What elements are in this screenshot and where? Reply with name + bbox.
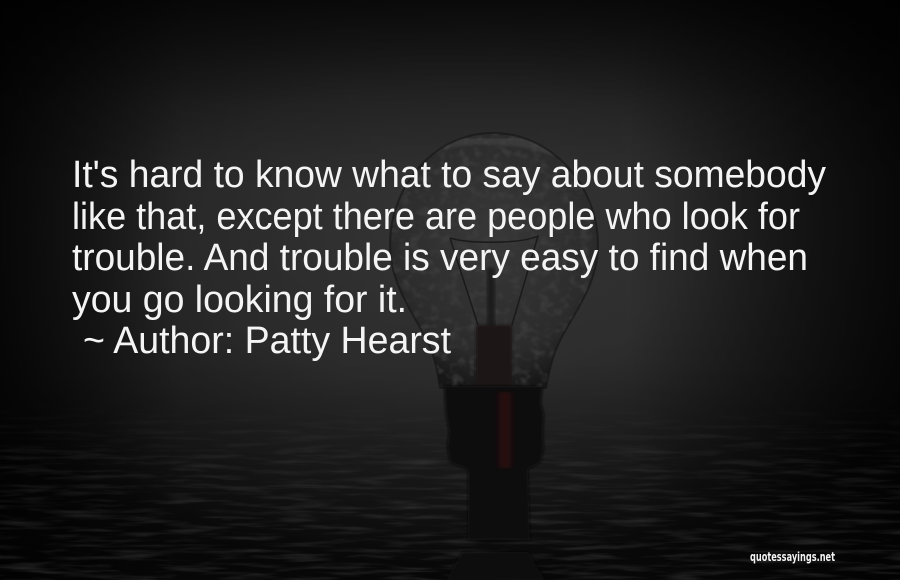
wet surface ripples — [0, 435, 900, 580]
screw base — [444, 386, 544, 540]
watermark: quotessayings.net — [750, 550, 835, 564]
bulb glass — [385, 130, 605, 390]
quote text: It's hard to know what to say about somebody — [72, 154, 826, 196]
quote text — [72, 154, 826, 321]
red reflection on base — [494, 392, 516, 468]
bulb outline — [390, 133, 598, 388]
quote text: like that, except there are people who look for — [72, 196, 800, 238]
base reflection in water — [446, 552, 545, 580]
light bulb — [385, 130, 605, 580]
quote text: trouble. And trouble is very easy to find when — [72, 237, 808, 279]
author line: ~ Author: Patty Hearst — [83, 320, 451, 362]
quote text: you go looking for it. — [72, 279, 407, 321]
